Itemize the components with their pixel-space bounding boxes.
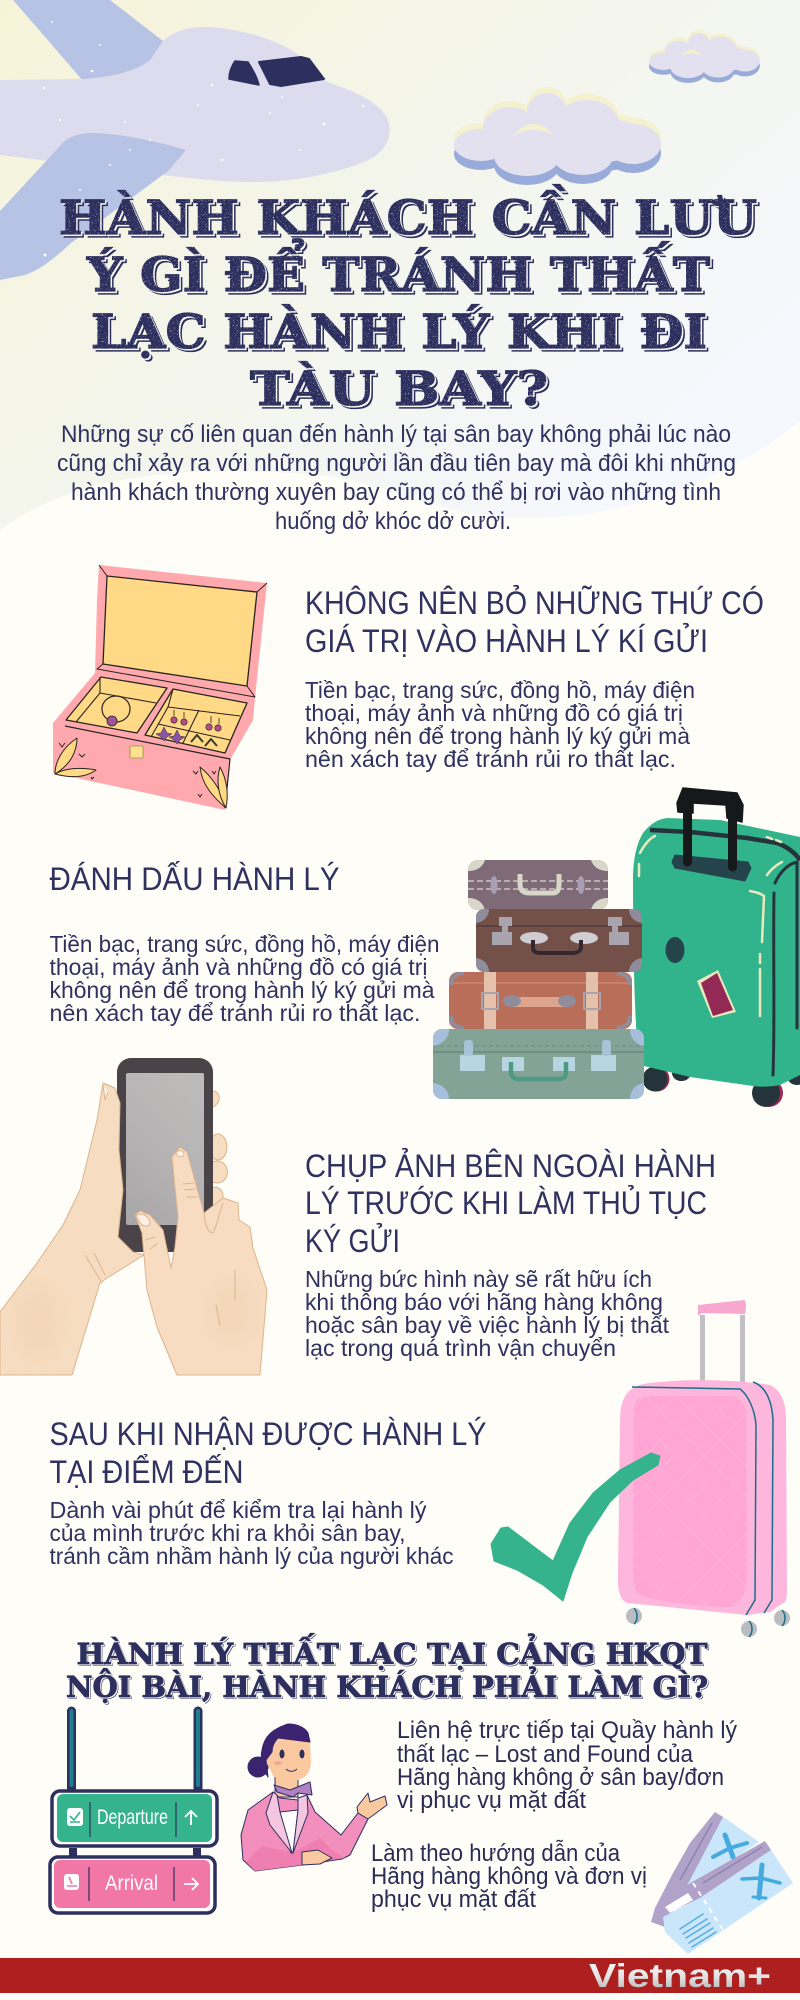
- text: contact lost and found: vị phục vụ mặt đất: [397, 1787, 586, 1814]
- intro paragraph: hành khách thường xuyên bay cũng có thể bị rơi vào những tình: [71, 479, 721, 506]
- sign: arrival: Arrival: [105, 1872, 158, 1895]
- text: section 2 body: nên xách tay để tránh rủi ro thất lạc.: [50, 1000, 420, 1026]
- icon: plane tickets: [651, 1812, 793, 1954]
- text: section 1 body: nên xách tay để tránh rủi ro thất lạc.: [305, 746, 676, 772]
- text: follow the instructions: [371, 1840, 647, 1913]
- text: section 2 body: [50, 931, 440, 1026]
- text: section 1 body: Tiền bạc, trang sức, đồng hồ, máy điện: [305, 677, 695, 703]
- heading: section 3: LÝ TRƯỚC KHI LÀM THỦ TỤC: [305, 1185, 707, 1221]
- heading: lost luggage at Noi Bai: [66, 1632, 708, 1704]
- heading: section 3: KÝ GỬI: [305, 1223, 400, 1259]
- suitcase: purple: [468, 860, 608, 910]
- text: section 4 body: [50, 1497, 454, 1569]
- text: section 1 body: thoại, máy ảnh và những đồ có giá trị: [305, 700, 683, 726]
- text: section 2 body: Tiền bạc, trang sức, đồng hồ, máy điện: [50, 931, 440, 957]
- text: section 1 body: [305, 677, 695, 772]
- heading: section 2: ĐÁNH DẤU HÀNH LÝ: [50, 861, 340, 897]
- heading: section 4: [50, 1416, 486, 1490]
- intro paragraph: cũng chỉ xảy ra với những người lần đầu tiên bay mà đôi khi những: [57, 450, 736, 477]
- text: section 2 body: thoại, máy ảnh và những đồ có giá trị: [50, 954, 428, 980]
- text: section 2 body: không nên để trong hành lý ký gửi mà: [50, 977, 435, 1003]
- text: section 3 body: lạc trong quá trình vận chuyển: [305, 1335, 616, 1361]
- title: TÀU BAY?: [250, 361, 548, 417]
- illustration: flight attendant: [241, 1724, 387, 1871]
- icon: stack of suitcases: [433, 860, 644, 1099]
- text: follow the instructions: Làm theo hướng dẫn của: [371, 1840, 620, 1867]
- intro paragraph: huống dở khóc dở cười.: [275, 508, 511, 535]
- text: follow the instructions: Hãng hàng không và đơn vị: [371, 1863, 647, 1890]
- icon: jewelry box: [53, 565, 267, 810]
- text: contact lost and found: Liên hệ trực tiếp tại Quầy hành lý: [397, 1717, 738, 1744]
- text: contact lost and found: [397, 1717, 738, 1814]
- text: contact lost and found: Hãng hàng không ở sân bay/đơn: [397, 1764, 724, 1791]
- suitcase: brown: [476, 909, 642, 972]
- text: section 4 body: của mình trước khi ra khỏi sân bay,: [50, 1520, 406, 1546]
- footer bar: [0, 1957, 800, 1994]
- intro paragraph: [57, 421, 736, 535]
- icon: check mark: [491, 1453, 660, 1601]
- title: Ý GÌ ĐỂ TRÁNH THẤT: [86, 238, 710, 303]
- sign: departure: [52, 1791, 217, 1846]
- icon: large cloud: [454, 87, 661, 185]
- text: section 4 body: Dành vài phút để kiểm tra lại hành lý: [50, 1497, 427, 1523]
- text: section 4 body: tránh cầm nhầm hành lý của người khác: [50, 1543, 454, 1569]
- title: LẠC HÀNH LÝ KHI ĐI: [91, 304, 707, 360]
- text: follow the instructions: phục vụ mặt đất: [371, 1886, 536, 1913]
- text: section 3 body: Những bức hình này sẽ rất hữu ích: [305, 1266, 652, 1292]
- sign: departure: Departure: [97, 1806, 168, 1829]
- header gradient backdrop: [0, 0, 800, 530]
- text: section 3 body: hoặc sân bay về việc hành lý bị thất: [305, 1312, 670, 1338]
- suitcase: green-grey: [433, 1029, 644, 1099]
- icon: departure and arrival signs: [50, 1711, 217, 1913]
- text: section 3 body: [305, 1266, 670, 1361]
- text: contact lost and found: thất lạc – Lost and Found của: [397, 1741, 693, 1768]
- title: [59, 185, 757, 417]
- suitcase: orange: [449, 972, 632, 1029]
- illustration: airplane: [0, 0, 390, 280]
- illustration: hands holding phone: [0, 1058, 267, 1375]
- heading: section 1: [305, 585, 764, 659]
- logo: Vietnam+: Vietnam+: [589, 1957, 771, 1994]
- icon: small cloud: [649, 30, 760, 83]
- sign: arrival: [50, 1857, 215, 1913]
- heading: lost luggage at Noi Bai: HÀNH LÝ THẤT LẠC TẠI CẢNG HKQT: [76, 1632, 708, 1671]
- heading: lost luggage at Noi Bai: NỘI BÀI, HÀNH KHÁCH PHẢI LÀM GÌ?: [66, 1665, 708, 1704]
- heading: section 1: GIÁ TRỊ VÀO HÀNH LÝ KÍ GỬI: [305, 623, 708, 659]
- icon: green trolley suitcase: [633, 788, 800, 1107]
- heading: section 3: CHỤP ẢNH BÊN NGOÀI HÀNH: [305, 1148, 716, 1184]
- heading: section 4: TẠI ĐIỂM ĐẾN: [50, 1454, 244, 1490]
- heading: section 3: [305, 1148, 716, 1259]
- intro paragraph: Những sự cố liên quan đến hành lý tại sân bay không phải lúc nào: [61, 421, 731, 448]
- heading: section 4: SAU KHI NHẬN ĐƯỢC HÀNH LÝ: [50, 1416, 486, 1452]
- text: section 3 body: khi thông báo với hãng hàng không: [305, 1289, 663, 1315]
- text: section 1 body: không nên để trong hành lý ký gửi mà: [305, 723, 690, 749]
- icon: pink suitcase: [618, 1300, 790, 1637]
- title: HÀNH KHÁCH CẦN LƯU: [59, 185, 757, 246]
